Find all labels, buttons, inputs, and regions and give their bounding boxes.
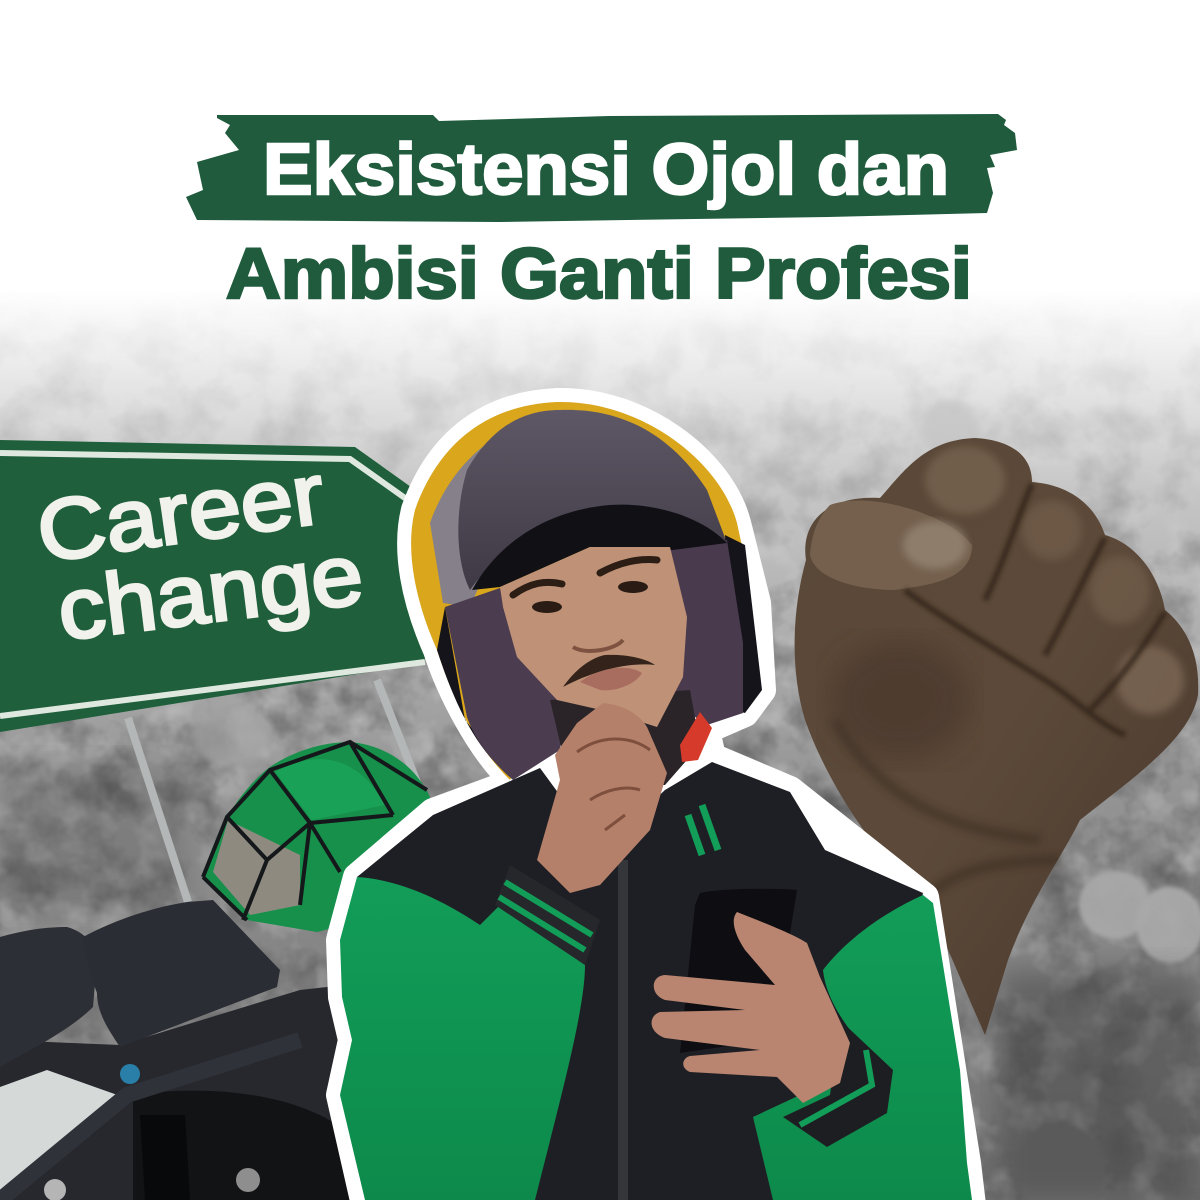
- eyes: [532, 581, 648, 613]
- raised fist: [795, 438, 1198, 1035]
- right ear pad and black shell: [725, 535, 762, 713]
- jacket body: [357, 762, 923, 1200]
- knuckle creases: [577, 739, 650, 830]
- hand holding phone: [652, 912, 850, 1103]
- road sign: Career change: [0, 440, 425, 732]
- sign text: Career: [31, 446, 330, 581]
- background: crowd of riders: [0, 290, 1200, 1200]
- hand on chin: [537, 703, 667, 893]
- sign text: change: [53, 526, 368, 659]
- neck and chin strap: [550, 690, 700, 785]
- left cuff: [495, 865, 600, 965]
- sign poles: [128, 680, 420, 902]
- sticker outline: [340, 402, 972, 1200]
- title banner: torn green tape: [186, 114, 1017, 222]
- helmet yellow shell: [411, 402, 745, 780]
- collar stripes: [688, 805, 718, 855]
- title line 2: Ambisi Ganti Profesi: [226, 235, 972, 314]
- nose: [573, 640, 623, 651]
- green helmet on the bike: [203, 742, 430, 932]
- lips: [580, 668, 642, 690]
- jacket zipper: [618, 860, 628, 1200]
- right cuff: [783, 1020, 893, 1147]
- left ear pad and black shell: [437, 607, 515, 780]
- moustache: [563, 655, 655, 687]
- clear visor edge: [430, 412, 555, 607]
- motorbike: [0, 900, 365, 1200]
- title line 1: Eksistensi Ojol dan: [263, 130, 949, 210]
- helmet brim: [472, 505, 727, 590]
- sign text: [31, 446, 368, 659]
- helmet dome: [458, 410, 727, 590]
- face: [500, 547, 687, 727]
- phone: [680, 889, 797, 1053]
- brows: [513, 560, 657, 595]
- right green sleeve: [753, 895, 972, 1200]
- left green sleeve: [340, 877, 585, 1200]
- strap buckle: [680, 712, 712, 762]
- person: thinking ojol driver: [340, 402, 972, 1200]
